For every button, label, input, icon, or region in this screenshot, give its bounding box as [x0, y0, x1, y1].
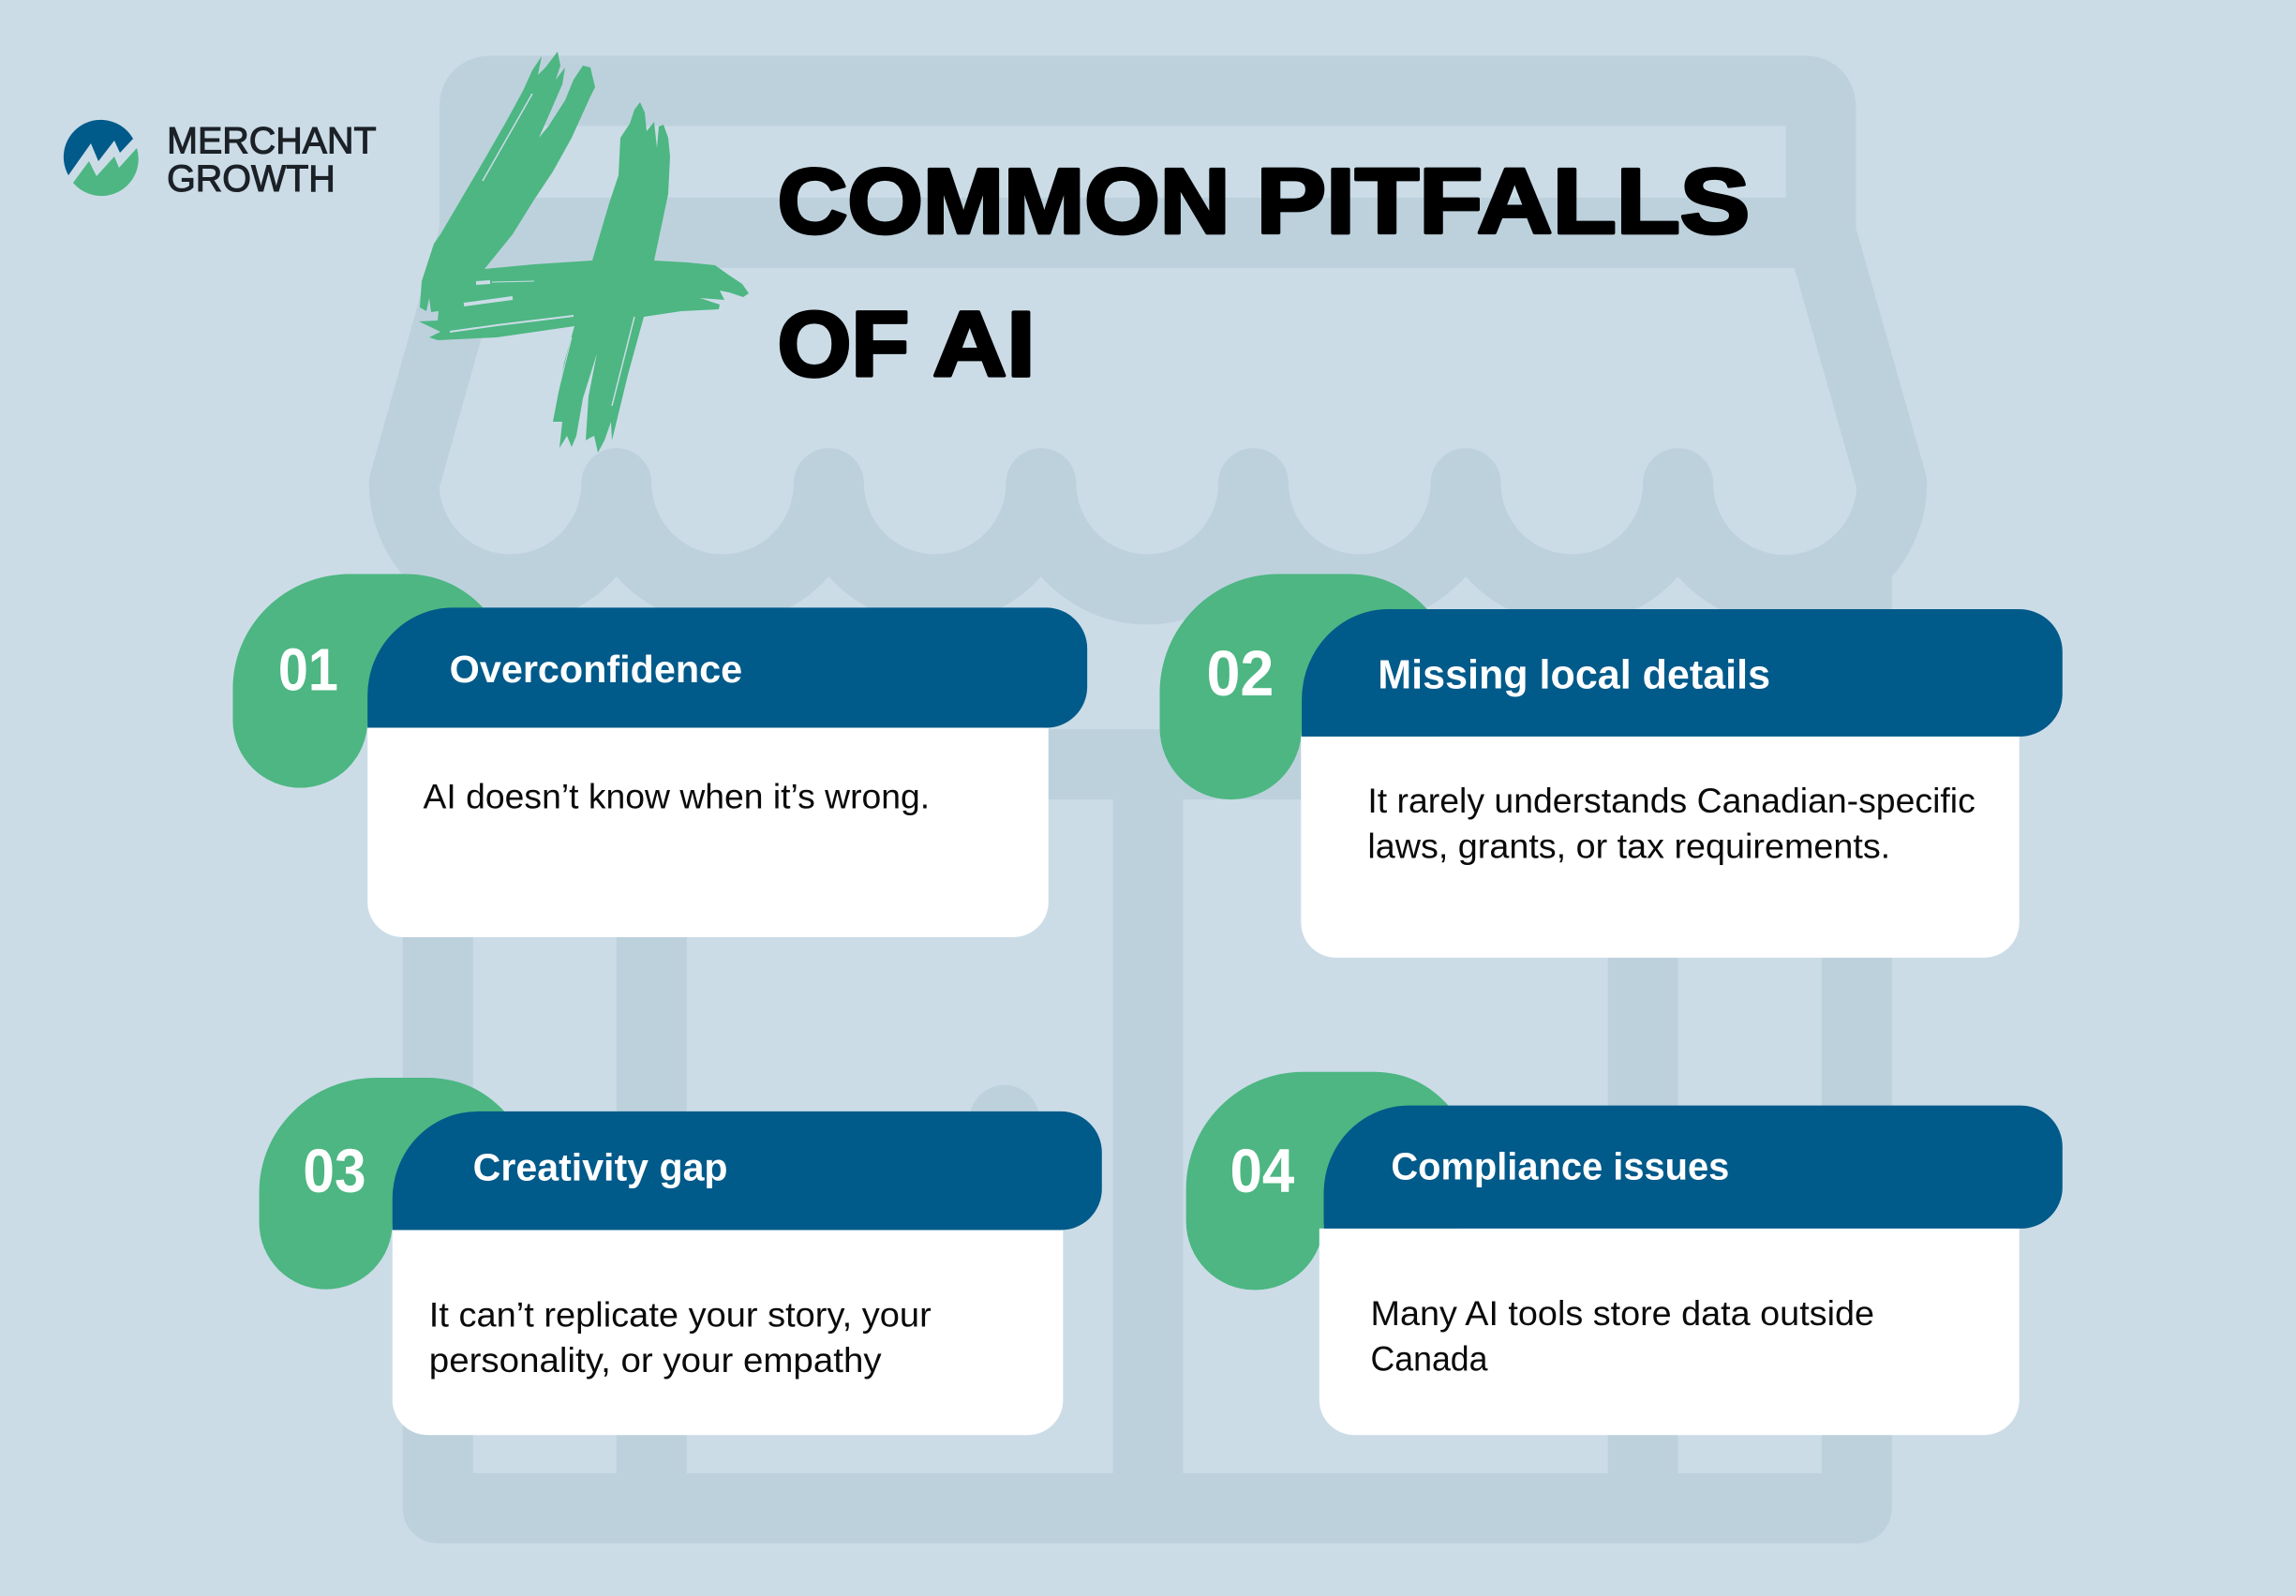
- card body: [1301, 737, 2020, 958]
- title: PITFALLS: [1257, 149, 1750, 252]
- header bar: [367, 607, 1087, 728]
- number tab 01: [232, 574, 495, 788]
- text: It rarely understands Canadian-specific: [1367, 782, 1975, 820]
- card body: [1319, 1229, 2020, 1435]
- logo wordmark: GROWTH: [167, 158, 335, 200]
- number: 01: [278, 636, 338, 704]
- heading: Missing local details: [1378, 651, 1770, 697]
- text: AI doesn’t know when it’s wrong.: [424, 777, 930, 815]
- text: Canada: [1370, 1339, 1488, 1378]
- text: laws, grants, or tax requirements.: [1367, 828, 1890, 866]
- storefront background icon: [404, 91, 1892, 1508]
- title: COMMON: [778, 149, 1230, 252]
- logo wordmark: [167, 120, 377, 200]
- panel: 02 Missing local details: [1160, 574, 2063, 958]
- card body: [367, 728, 1049, 937]
- header bar: [393, 1111, 1102, 1231]
- panel: 01 Overconfidence: [232, 574, 1087, 937]
- number: 04: [1230, 1137, 1295, 1205]
- text: [1367, 782, 1975, 866]
- header bar: [1323, 1106, 2063, 1229]
- heading: Overconfidence: [450, 648, 742, 691]
- number: 02: [1206, 637, 1274, 709]
- icon: logo mark: [64, 120, 139, 196]
- text: [1370, 1294, 1874, 1378]
- text: It can’t replicate your story, your: [429, 1296, 932, 1335]
- number tab 02: [1160, 574, 1438, 799]
- number tab 04: [1186, 1072, 1457, 1290]
- number tab 03: [260, 1078, 515, 1290]
- card body: [393, 1230, 1063, 1435]
- logo wordmark: MERCHANT: [167, 120, 377, 161]
- brush texture gaps: [450, 94, 634, 412]
- header bar: [1302, 609, 2063, 737]
- title: AI: [932, 292, 1036, 395]
- panel: 04 Compliance issues: [1186, 1072, 2063, 1435]
- number: 03: [303, 1137, 366, 1205]
- panel: 03 Creativity gap: [260, 1078, 1102, 1435]
- text: personality, or your empathy: [429, 1341, 882, 1380]
- title: OF: [778, 292, 909, 395]
- text: [429, 1296, 932, 1380]
- heading: Creativity gap: [473, 1145, 728, 1188]
- logo: Merchant Growth: [64, 120, 377, 200]
- brush-stroke numeral 4: [419, 52, 749, 453]
- heading: Compliance issues: [1391, 1145, 1729, 1188]
- text: Many AI tools store data outside: [1370, 1294, 1874, 1333]
- title: [778, 149, 1750, 395]
